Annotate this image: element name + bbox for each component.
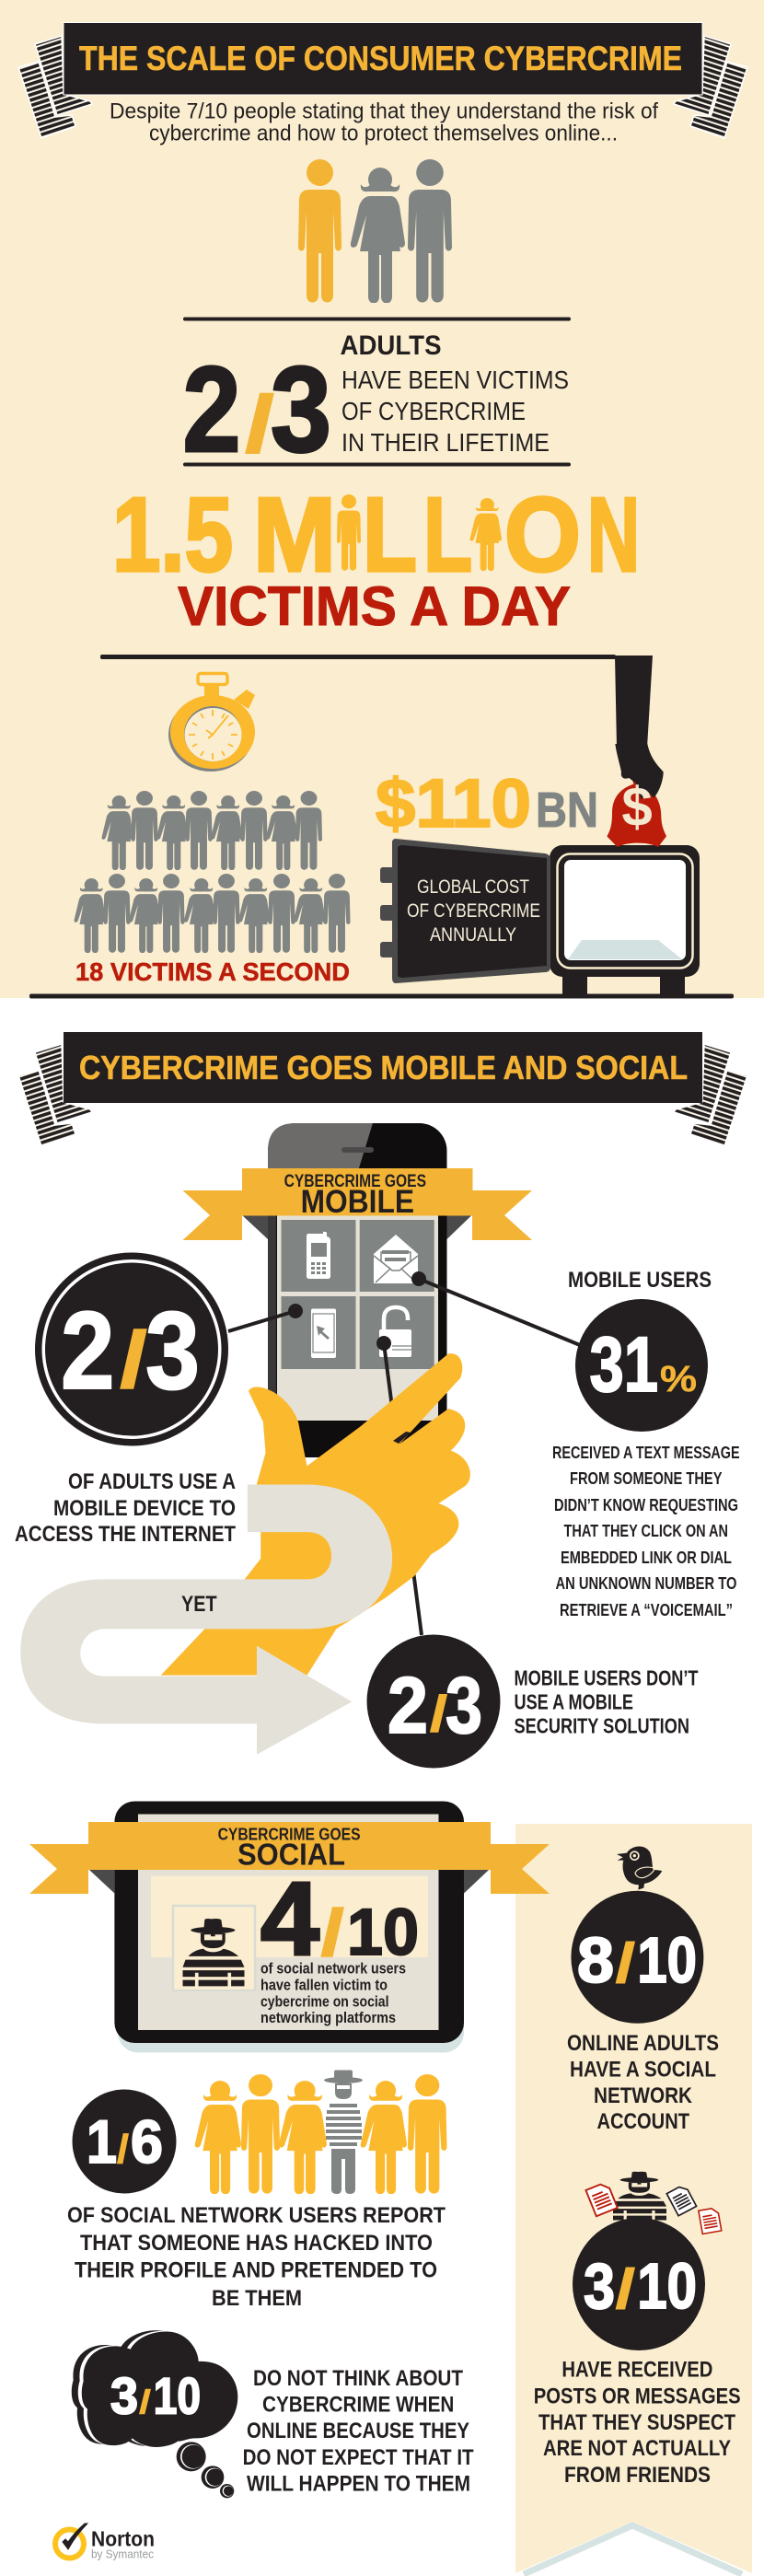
curved arrow [20,1484,392,1755]
connector lines [228,1271,580,1635]
panel: the scale of consumer cybercrime [0,0,764,998]
stat: 2/3 adults victims: ADULTS [341,331,442,361]
stat: 1.5 million victims a day: N [587,477,640,594]
text: do not think about cybercrime: CYBERCRIME WHEN [262,2392,454,2418]
gap between fingers [393,1432,411,1444]
stat: 8/10 circle: 8 [577,1924,614,1996]
logo: Norton by Symantec: by Symantec [91,2547,154,2561]
stat: 4/10 [260,1861,419,1977]
text: do not think about cybercrime: DO NOT EXPECT THAT IT [243,2445,474,2470]
icon: hand dropping money bag [607,656,666,847]
stat: 8/10 circle: 10 [637,1924,697,1996]
text: of social network users report: THAT SOMEONE HAS HACKED INTO [80,2231,433,2256]
text: online adults: ACCOUNT [596,2109,689,2134]
mobile ribbon: CYBERCRIME GOES [284,1172,426,1191]
icon: hand holding phone [161,1353,470,1676]
text: of social network users report: OF SOCIAL NETWORK USERS REPORT [67,2203,446,2228]
icon: thought cloud with 3/10: 10 [154,2367,201,2425]
stat: 8/10 circle [571,1891,703,2024]
stat: 2/3 small circle: 2 [388,1662,428,1750]
mobile ribbon [182,1168,532,1240]
text: mobile users don't use security: MOBILE USERS DON’T [514,1666,698,1690]
text: do not think about cybercrime: ONLINE BECAUSE THEY [247,2419,469,2443]
stat: 1/6 circle: / [117,2127,129,2172]
stat: 1.5 million victims a day: VICTIMS A DAY [178,575,571,637]
stat: 1/6 circle: 6 [131,2107,163,2176]
text on safe door [407,876,540,946]
impostor figure [324,2070,363,2194]
social ribbon [29,1822,550,1894]
stat: 1.5 million victims a day: L [363,477,417,594]
stat: 4/10: 4 [260,1861,319,1977]
stat: 2/3 adults victims: 3 [271,342,331,477]
stat: 2/3 adults victims [182,317,571,477]
stat: 4/10: 10 [347,1897,419,1969]
icon: stopwatch [168,674,255,772]
text: of social network users fallen victim [260,1961,406,2026]
icon: bird [617,1846,662,1890]
intro text: Despite 7/10 people stating that they understand the risk of [110,99,658,123]
icon: tablet [114,1801,464,2053]
phone tile: mobile handset [282,1220,355,1292]
stat: 2/3 circle: 2 [61,1289,114,1412]
stat: 2/3 circle: / [121,1317,146,1403]
text: do not think about cybercrime: WILL HAPPEN TO THEM [247,2471,470,2497]
text: of social network users report: BE THEM [212,2286,302,2311]
text: do not think about cybercrime: DO NOT THINK ABOUT [253,2366,463,2391]
stat: 2/3 adults victims: 2 [182,342,241,477]
stat: 3/10 circle: 10 [637,2250,697,2322]
text: mobile users don't use security: USE A MOBILE [514,1689,633,1713]
section heading banner: CYBERCRIME GOES MOBILE AND SOCIAL [79,1049,688,1086]
phone tile: envelope [360,1220,434,1292]
stat: $110bn: $110 [376,765,531,841]
text: have received posts: THAT THEY SUSPECT [538,2410,735,2435]
stat: 1.5 million victims a day: O [504,477,581,594]
social ribbon: CYBERCRIME GOES [218,1825,361,1844]
panel: sidebar social stats [515,1824,752,2574]
logo: Norton by Symantec: Norton [91,2527,155,2551]
icon: hand dropping money bag: $ [621,776,653,838]
stat: 31% circle: 31 [589,1321,658,1408]
intro text [110,99,658,145]
text on safe door: ANNUALLY [430,924,516,946]
icon: thought cloud with 3/10: / [139,2384,151,2421]
text: of social network users fallen victim: have fallen victim to [260,1978,388,1994]
icon: open safe [380,839,700,995]
phone tile: open padlock [360,1296,434,1369]
text: online adults [567,2031,719,2134]
text: do not think about cybercrime [243,2366,474,2497]
icon: three adults, one highlighted [298,159,452,304]
panel: cybercrime goes social [29,1801,550,2561]
stat: 2/3 adults victims: IN THEIR LIFETIME [341,428,550,457]
stat: 31% circle [575,1299,708,1432]
text: received a text message: FROM SOMEONE THEY [570,1468,723,1488]
stat: $110bn [376,765,598,841]
text: of social network users report [67,2203,446,2311]
title banner: THE SCALE OF CONSUMER CYBERCRIME [79,40,682,77]
mobile ribbon: MOBILE [301,1184,414,1220]
text: received a text message [552,1443,740,1619]
icon: thought cloud with 3/10: 3 [110,2367,138,2425]
icon: crowd of 18 victims [75,791,350,953]
text: online adults: NETWORK [594,2083,693,2108]
title banner [18,22,747,138]
text: have received posts [534,2358,741,2488]
stat: $110bn: BN [536,783,598,838]
stat: 2/3 small circle [366,1635,501,1768]
text: online adults: HAVE A SOCIAL [570,2058,716,2083]
divider with arm [100,655,616,659]
stat: 2/3 circle [35,1252,228,1445]
text: have received posts: ARE NOT ACTUALLY [543,2436,731,2461]
text: mobile users don't use security: SECURITY SOLUTION [514,1713,689,1737]
stat: 4/10: / [321,1897,343,1968]
text: have received posts: HAVE RECEIVED [561,2358,712,2383]
stat: 3/10 circle: 3 [584,2250,615,2322]
text: of social network users fallen victim: networking platforms [260,2010,396,2026]
text: of adults use a mobile device: ACCESS THE INTERNET [15,1522,236,1547]
stat: 1.5 million victims a day [112,477,640,637]
text: of adults use a mobile device: MOBILE DEVICE TO [53,1496,236,1521]
text: of social network users fallen victim: cybercrime on social [260,1993,388,2010]
label: yet: YET [181,1592,217,1617]
icon: thought cloud with 3/10 [72,2330,237,2498]
icon: smartphone [228,1123,580,1635]
ground line [29,994,734,998]
stat: 2/3 small circle: / [430,1685,447,1742]
stat: 1.5 million victims a day: L [423,477,472,594]
logo: Norton by Symantec [55,2524,155,2561]
label: 18 victims a second: 18 VICTIMS A SECOND [75,957,350,986]
stat: 1.5 million victims a day: 1.5 [112,477,233,594]
icon: thief portrait [173,1906,255,1990]
text: online adults: ONLINE ADULTS [567,2031,719,2056]
stat: 2/3 adults victims: OF CYBERCRIME [341,397,526,425]
text: mobile users don't use security [514,1666,698,1737]
section heading banner [18,1032,747,1146]
text: of social network users fallen victim: of social network users [260,1961,406,1978]
stat: 1/6 circle: 1 [87,2107,117,2176]
icon: thief with documents [585,2172,722,2234]
stat: 2/3 small circle: 3 [446,1662,482,1750]
panel: cybercrime goes mobile [15,1032,747,1768]
stat: 2/3 adults victims: HAVE BEEN VICTIMS [341,366,569,394]
text on safe door: GLOBAL COST [417,876,529,898]
stat: 3/10 circle: / [616,2258,635,2320]
intro text: cybercrime and how to protect themselves online... [149,122,618,145]
social ribbon: SOCIAL [237,1838,345,1872]
stat: 3/10 circle [573,2218,705,2350]
text on safe door: OF CYBERCRIME [407,900,540,922]
text: of adults use a mobile device [15,1469,236,1547]
phone tile: touchscreen [282,1296,355,1369]
stat: 1.5 million victims a day: M [253,477,336,594]
stat: 1/6 circle [72,2090,177,2193]
stat: 2/3 adults victims: / [246,381,273,469]
icon: row of people with impostor [195,2070,447,2194]
stat: 2/3 circle: 3 [145,1289,200,1412]
stat: 31% circle: % [660,1359,697,1399]
text: have received posts: FROM FRIENDS [564,2463,711,2488]
text: of adults use a mobile device: OF ADULTS USE A [68,1469,236,1494]
label: mobile users: MOBILE USERS [568,1268,712,1293]
stat: 8/10 circle: / [616,1932,635,1994]
text: of social network users report: THEIR PROFILE AND PRETENDED TO [75,2257,437,2283]
